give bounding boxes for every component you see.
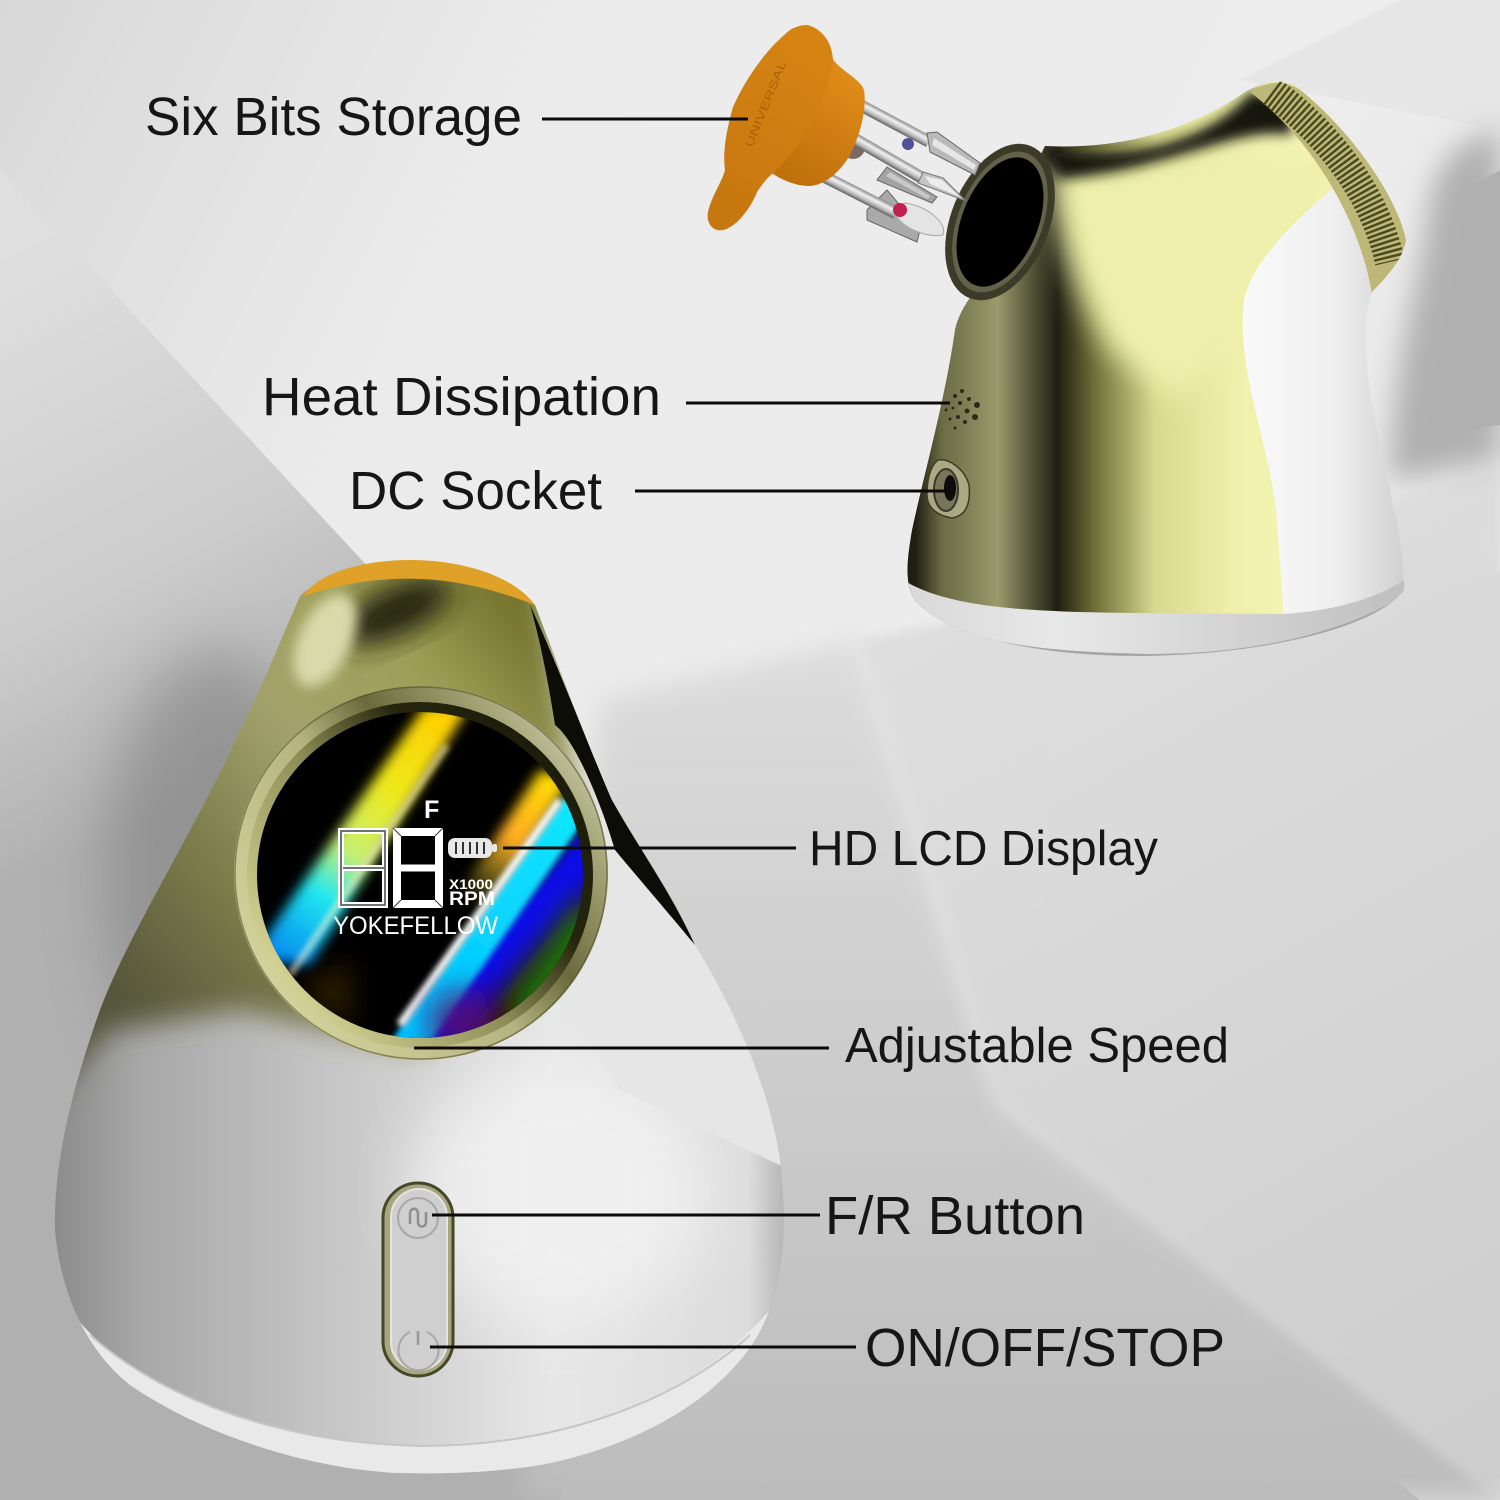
callout: on/off/stop: ON/OFF/STOP	[865, 1318, 1225, 1378]
rear body	[890, 70, 1420, 670]
dial ring	[234, 686, 608, 1060]
icon: F/R	[398, 1198, 438, 1238]
white side panel	[1242, 188, 1404, 614]
unit labels	[449, 880, 494, 905]
rainbow stripes	[264, 712, 583, 1038]
upper right white shoulder	[695, 968, 780, 1166]
callout: six bits storage: Six Bits Storage	[145, 87, 522, 147]
unit labels: RPM	[449, 889, 495, 910]
callout: heat dissipation: Heat Dissipation	[262, 367, 661, 427]
bits storage	[708, 25, 980, 242]
callout: F/R button: F/R Button	[825, 1186, 1085, 1246]
device: rear view	[890, 70, 1420, 670]
orange top	[303, 560, 535, 605]
icon: DC socket	[927, 460, 969, 518]
front body	[40, 560, 800, 1480]
device: front view	[40, 560, 800, 1480]
callout: HD LCD display: HD LCD Display	[809, 822, 1158, 876]
bottom lip	[80, 1312, 769, 1474]
orange cap disc	[708, 25, 833, 230]
olive dome	[40, 560, 575, 1110]
orange cap collar	[770, 55, 865, 186]
icon: power	[398, 1331, 438, 1370]
icon: battery	[448, 838, 497, 858]
callout: DC socket: DC Socket	[349, 461, 602, 521]
LCD display	[257, 712, 583, 1038]
brand name: YOKEFELLOW	[333, 912, 498, 940]
icon: ventilation holes	[944, 389, 980, 430]
nose opening	[924, 128, 1076, 316]
control button	[383, 1183, 453, 1376]
direction letter: F	[424, 796, 439, 824]
callout: adjustable speed: Adjustable Speed	[845, 1019, 1229, 1073]
white base	[908, 580, 1404, 656]
unit labels: X1000	[449, 876, 493, 892]
drill bits	[820, 100, 980, 242]
speed digits	[341, 828, 443, 908]
knurled ring	[1250, 83, 1408, 296]
cap engraving: UNIVERSAL	[744, 59, 789, 149]
